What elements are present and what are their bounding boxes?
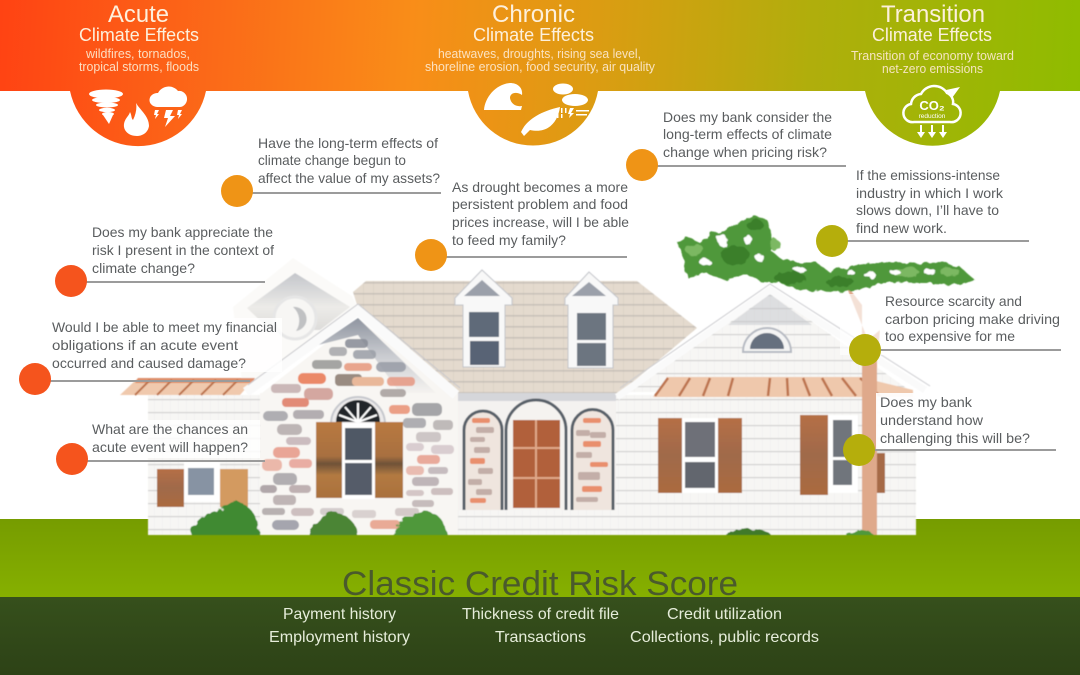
callout: drought question: persistent problem and food <box>452 196 628 212</box>
heading: chronic climate effects <box>425 1 656 74</box>
icon: tornado <box>89 90 123 124</box>
heading: chronic climate effects: Climate Effects <box>473 25 594 45</box>
callout: financial obligations question: obligations if an acute event <box>52 337 238 353</box>
credit factors list: Transactions <box>495 629 586 646</box>
left wing awning <box>120 378 255 395</box>
tree trunk <box>845 283 880 535</box>
tree foliage <box>678 215 975 292</box>
icon: wave <box>484 83 522 110</box>
heading: transition climate effects: Transition <box>881 1 985 28</box>
heading: acute climate effects: tropical storms, floods <box>79 60 199 74</box>
stones <box>260 339 454 530</box>
callout: emissions-intense work question: slows down, I’ll have to <box>856 202 999 218</box>
heading: acute climate effects: wildfires, tornados, <box>85 47 190 61</box>
icon: storm cloud <box>149 87 187 127</box>
heading: transition climate effects <box>851 1 1014 76</box>
faded label backing boxes <box>50 293 1062 458</box>
heading: chronic climate effects: Chronic <box>492 1 575 28</box>
right wing window two <box>800 415 885 495</box>
callout: acute event chance question: acute event will happen? <box>92 439 248 455</box>
callout: carbon pricing question <box>849 293 1061 366</box>
credit factors list: Employment history <box>269 629 410 646</box>
callout: asset value question: affect the value of my assets? <box>258 170 440 186</box>
callout: emissions-intense work question: find new work. <box>856 220 947 236</box>
right gable <box>617 284 930 397</box>
credit factors list <box>269 606 819 646</box>
callout: asset value question <box>221 135 441 207</box>
callout: bank pricing risk question: change when pricing risk? <box>663 144 827 160</box>
callout: bank understands challenge question: Does my bank <box>880 394 973 410</box>
heading: transition climate effects: net-zero emissions <box>882 62 983 76</box>
credit factors list: Collections, public records <box>630 629 819 646</box>
left back gable <box>233 258 358 390</box>
left dormer <box>455 270 512 367</box>
title: classic credit risk score: Classic Credit Risk Score <box>342 565 738 603</box>
front door <box>513 420 560 508</box>
callout: carbon pricing question: too expensive for me <box>885 328 1015 344</box>
heading: transition climate effects: Climate Effects <box>872 25 992 45</box>
right wing wall <box>616 395 916 535</box>
callout: bank pricing risk question <box>626 109 846 181</box>
callout: bank appreciates risk question: climate change? <box>92 260 195 276</box>
left wing window <box>157 462 248 507</box>
heading: chronic climate effects: heatwaves, droughts, rising sea level, <box>438 47 641 61</box>
heading: acute climate effects <box>79 1 199 74</box>
credit factors list: Thickness of credit file <box>462 606 619 623</box>
icon: CO2 reduction cloud <box>903 86 961 138</box>
callout: acute event chance question: What are the chances an <box>92 421 248 437</box>
callout: bank appreciates risk question <box>55 224 274 297</box>
heading: transition climate effects: Transition of economy toward <box>851 49 1014 63</box>
house illustration <box>120 215 975 550</box>
callout: asset value question: Have the long-term effects of <box>258 135 438 151</box>
callout: bank understands challenge question: understand how <box>880 412 984 428</box>
right gable half-round window <box>743 328 791 352</box>
callout: drought question: to feed my family? <box>452 232 566 248</box>
callout: drought question: prices increase, will I be able <box>452 214 629 230</box>
main roof <box>353 281 697 397</box>
heading: acute climate effects: Climate Effects <box>79 25 199 45</box>
callout: financial obligations question <box>19 319 277 395</box>
callout: bank understands challenge question: challenging this will be? <box>880 430 1030 446</box>
heading: chronic climate effects: shoreline erosion, food security, air quality <box>425 60 656 74</box>
callout: financial obligations question: Would I be able to meet my financial <box>52 319 277 335</box>
stone wall window with shutters and fanlight <box>316 397 403 499</box>
callout: bank appreciates risk question: Does my bank appreciate the <box>92 224 273 240</box>
icon: CO2 reduction cloud: CO₂ <box>919 98 945 113</box>
icon: wind and rain clouds <box>553 84 589 118</box>
callout: bank understands challenge question <box>843 394 1056 466</box>
porch steps <box>458 510 616 535</box>
icon: drought leaf <box>521 107 560 136</box>
callout: carbon pricing question: carbon pricing make driving <box>885 311 1060 327</box>
callout: bank pricing risk question: Does my bank consider the <box>663 109 832 125</box>
credit factors list: Credit utilization <box>667 606 782 623</box>
shrubs <box>190 500 874 536</box>
header band with three semicircle tabs <box>0 0 1080 146</box>
callout: asset value question: climate change begun to <box>258 152 406 168</box>
credit factors list: Payment history <box>283 606 396 623</box>
right wing window one <box>658 418 742 493</box>
callout: acute event chance question <box>56 421 265 475</box>
callout: bank appreciates risk question: risk I present in the context of <box>92 242 274 258</box>
icon: CO2 reduction cloud: reduction <box>919 113 946 120</box>
callout: bank pricing risk question: long-term effects of climate <box>663 126 832 142</box>
callout: emissions-intense work question: industry in which I work <box>856 185 1004 201</box>
left wing wall <box>148 395 260 535</box>
callout: financial obligations question: occurred and caused damage? <box>52 355 246 371</box>
callout: emissions-intense work question: If the emissions-intense <box>856 167 1000 183</box>
stone wall <box>260 393 458 535</box>
porch <box>458 393 616 535</box>
heading: acute climate effects: Acute <box>108 1 169 28</box>
callout: emissions-intense work question <box>816 167 1029 257</box>
front gable <box>246 304 460 395</box>
right porch roof <box>653 377 913 397</box>
right dormer <box>565 272 618 368</box>
callout: carbon pricing question: Resource scarcity and <box>885 293 1022 309</box>
icon: flame <box>124 103 149 136</box>
dark footer band <box>0 597 1080 675</box>
callout: drought question <box>415 179 629 271</box>
callout: drought question: As drought becomes a more <box>452 179 628 195</box>
grass band <box>0 519 1080 597</box>
